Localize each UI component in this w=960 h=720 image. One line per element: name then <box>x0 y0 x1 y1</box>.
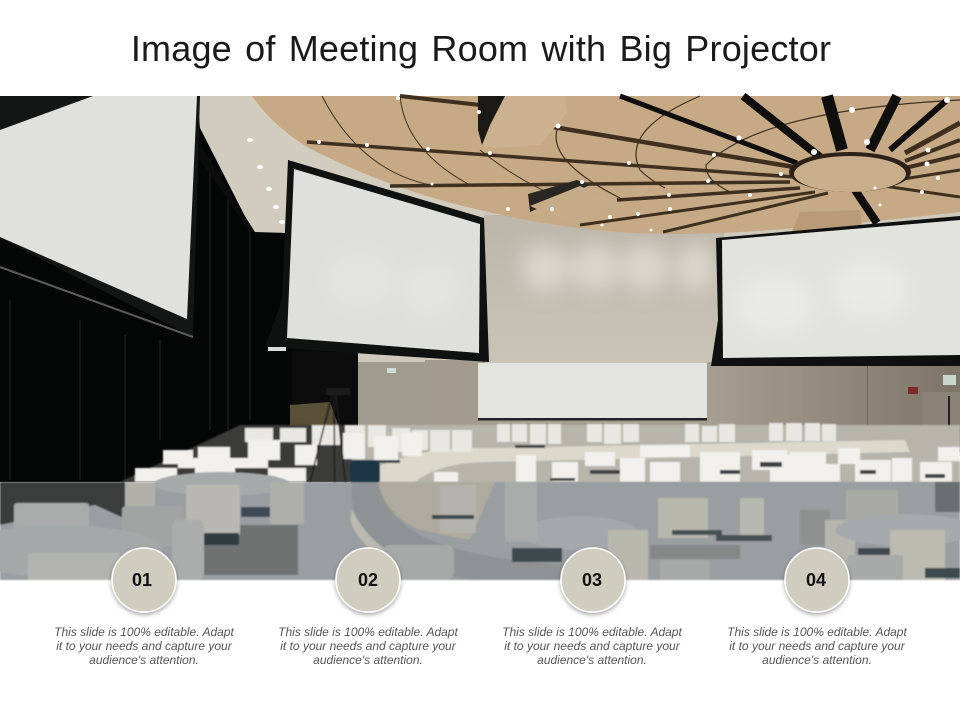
caption 4: it to your needs and capture your <box>729 639 906 653</box>
caption 2: audience's attention. <box>313 653 423 667</box>
number badge 02 <box>336 548 400 612</box>
camera tripod and bag <box>303 388 380 525</box>
dark chair seats <box>340 445 945 481</box>
number badge 03: 03 <box>582 570 602 590</box>
photo: meeting room <box>0 96 960 580</box>
number badge 01 <box>112 548 176 612</box>
exit sign left <box>387 368 396 373</box>
caption 1: audience's attention. <box>89 653 199 667</box>
caption 1: This slide is 100% editable. Adapt <box>54 625 234 639</box>
step 1 <box>54 548 234 667</box>
chair and table group left <box>0 472 304 580</box>
caption 2: it to your needs and capture your <box>280 639 457 653</box>
ceiling lights <box>317 96 950 232</box>
caption 4: This slide is 100% editable. Adapt <box>727 625 907 639</box>
caption 3: it to your needs and capture your <box>504 639 681 653</box>
side soffit with downlights <box>197 96 484 233</box>
floor back rows of chairs <box>120 388 960 525</box>
caption 3: audience's attention. <box>537 653 647 667</box>
caption 1: it to your needs and capture your <box>56 639 233 653</box>
projector screen: centre <box>265 160 489 362</box>
white chairs: back row <box>245 423 836 452</box>
step 2 <box>278 548 458 667</box>
dark alcove under centre screen <box>292 350 358 432</box>
number badge 04 <box>785 548 849 612</box>
overlay band: lower floor <box>0 472 960 580</box>
number badge 03 <box>561 548 625 612</box>
title: Image of Meeting Room with Big Projector <box>131 28 831 69</box>
curved counter in band <box>350 482 570 580</box>
caption 4: audience's attention. <box>762 653 872 667</box>
step 3 <box>502 548 682 667</box>
wood ceiling <box>252 96 960 241</box>
projector screen: right <box>711 216 960 366</box>
caption 3: This slide is 100% editable. Adapt <box>502 625 682 639</box>
curved counter <box>352 440 910 482</box>
white chairs: middle rows <box>135 432 960 482</box>
dark curtain wall <box>0 96 358 482</box>
back wall <box>260 96 960 456</box>
number badge 01: 01 <box>132 570 152 590</box>
ceiling arcs <box>322 96 430 185</box>
number badge 02: 02 <box>358 570 378 590</box>
step 4 <box>727 548 907 667</box>
hanging ceiling panels <box>478 96 863 241</box>
ceiling central disc <box>789 152 911 192</box>
dark left area <box>0 482 128 525</box>
caption 2: This slide is 100% editable. Adapt <box>278 625 458 639</box>
chairs and tables right of counter <box>505 482 960 580</box>
projector screen: left <box>0 96 200 337</box>
number badge 04: 04 <box>806 570 826 590</box>
ceiling spokes <box>307 96 960 232</box>
white board on back wall <box>478 363 707 419</box>
